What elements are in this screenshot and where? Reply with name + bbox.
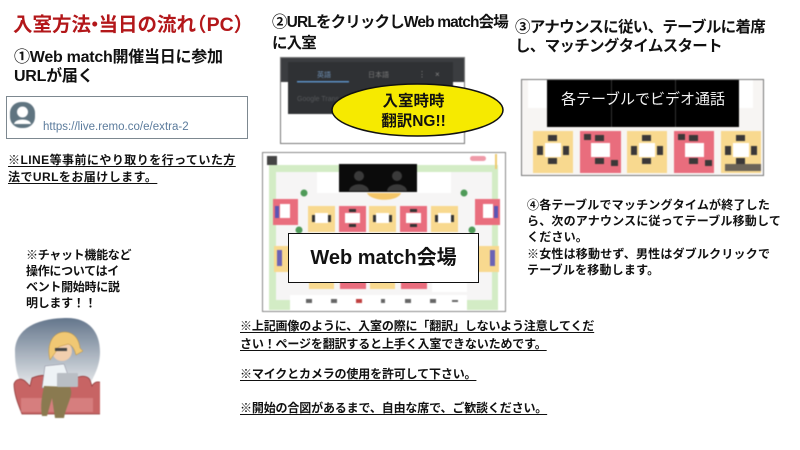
step 2 heading [272,14,508,52]
chat note: 操作についてはイ [26,264,119,278]
step 2 translate screenshot: 日本語 [368,70,389,79]
bottom note: translation warning: さい！ページを翻訳すると上手く入室できないためです。 [240,337,547,351]
callout text: 入室時時 [382,93,444,110]
icon: user avatar [9,101,36,129]
venue label box [288,233,479,283]
step 3 heading [515,18,766,55]
step 4 text: ら、次のアナウンスに従ってテーブル移動して [527,214,781,228]
step 1 note: 法でURLをお届けします。 [8,170,157,184]
step 2 translate screenshot: Google Trans [297,96,340,103]
step 2 translate screenshot [279,56,466,145]
step 4 text: テーブルを移動します。 [527,263,659,277]
step 1 URL message box [6,96,248,139]
video call caption: 各テーブルでビデオ通話 [561,91,725,108]
step 4 text: ※女性は移動せず、男性はダブルクリックで [527,247,770,261]
chat note: ※チャット機能など [26,248,131,262]
step 3 heading: ③アナウンスに従い、テーブルに着席 [515,19,765,36]
title: 入室方法・当日の流れ（PC） [13,14,253,36]
venue label box: Web match会場 [310,247,457,269]
venue screenshot [261,151,507,313]
step 2 translate screenshot: × [435,70,440,79]
bottom note: translation warning [240,319,594,351]
step 3 video call screenshot [520,78,765,177]
step 2 translate screenshot: ⋮ [418,70,426,79]
callout text: 翻訳NG!! [381,113,446,130]
bottom note: free seating: ※開始の合図があるまで、自由な席で、ご歓談ください。 [240,401,547,415]
step 4 text: ④各テーブルでマッチングタイムが終了した [527,198,770,212]
step 1 heading: ①Web match開催当日に参加 [14,49,223,66]
step 1 note: ※LINE等事前にやり取りを行っていた方 [8,153,236,167]
step 2 translate screenshot: 英語 [317,70,331,79]
step 1 heading: URLが届く [14,68,93,84]
step 2 heading: ②URLをクリックしWeb match会場 [272,14,508,31]
step 3 heading: し、マッチングタイムスタート [515,38,722,55]
URL text: https://live.remo.co/e/extra-2 [43,121,189,133]
chat note: ベント開始時に説 [26,280,120,294]
illustration: woman on sofa with laptop [12,317,101,419]
bottom note: translation warning: ※上記画像のように、入室の際に「翻訳」しないよう注意してくだ [240,319,594,333]
step 1 heading [14,48,223,84]
bottom note: mic and camera: ※マイクとカメラの使用を許可して下さい。 [240,367,476,381]
callout text [381,92,446,130]
step 4 text: ください。 [527,230,588,244]
step 1 note [8,153,236,184]
step 2 heading: に入室 [272,34,316,52]
chat note [26,248,132,310]
chat note: 明します！！ [26,296,96,310]
step 4 text [527,198,781,277]
callout: translation warning [331,83,504,137]
